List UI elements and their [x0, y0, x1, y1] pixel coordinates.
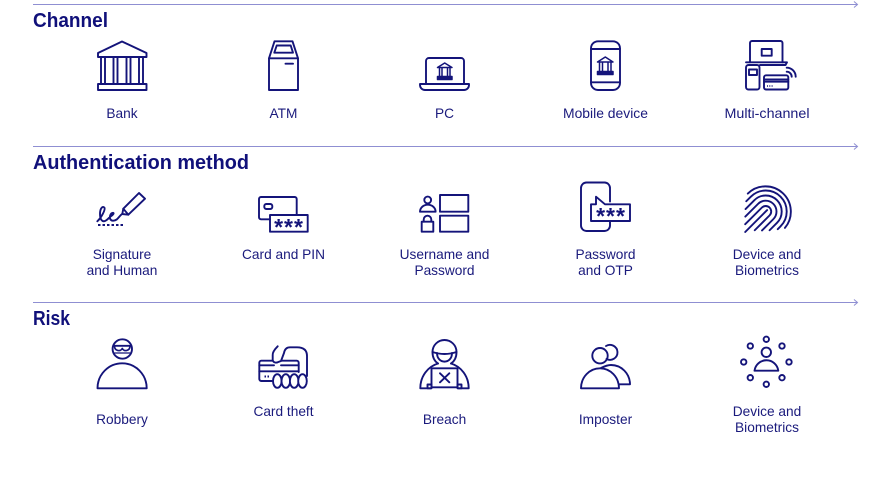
label: imposter: Imposter: [579, 412, 633, 427]
item: mobile device: [563, 41, 648, 121]
item: PC: [420, 58, 469, 121]
arrow: authentication method: [33, 144, 858, 150]
label: mobile device: Mobile device: [563, 106, 648, 121]
arrow: risk: [33, 300, 858, 306]
label: device and biometrics risk: Device and: [733, 404, 801, 419]
icon: PC laptop with bank: [420, 58, 469, 90]
icon: hacker with laptop: [420, 340, 469, 388]
item: device and biometrics risk: [733, 337, 801, 435]
panel: risk: [33, 300, 858, 435]
label: multi-channel: Multi-channel: [724, 106, 810, 121]
icon: mobile with bank: [591, 41, 620, 90]
label: device and biometrics: Device and: [733, 247, 801, 262]
icon: username and password: [420, 195, 468, 232]
label: PC: PC: [435, 106, 454, 121]
icon: card and PIN: [259, 197, 308, 232]
label: signature and human: and Human: [87, 263, 157, 278]
heading: channel: Channel: [33, 10, 108, 32]
icon: bank: [98, 42, 146, 90]
icon: phone and OTP bubble: [581, 182, 630, 231]
OTP asterisks: ***: [596, 203, 626, 229]
item: signature and human: [87, 193, 157, 278]
icon: hand taking card: [259, 346, 307, 388]
label: bank: Bank: [106, 106, 138, 121]
item: ATM: [269, 41, 298, 121]
panel: channel: [33, 2, 858, 121]
icon: signature and pen: [97, 193, 145, 225]
icon: two overlapping people: [581, 345, 630, 388]
item: bank: [98, 42, 146, 121]
label: robbery: Robbery: [96, 412, 148, 427]
item: multi-channel: [724, 41, 810, 121]
item: device and biometrics: [727, 176, 801, 278]
label: username and password: Password: [414, 263, 475, 278]
label: username and password: Username and: [400, 247, 489, 262]
label: card and PIN: Card and PIN: [242, 247, 325, 262]
label: breach: Breach: [423, 412, 466, 427]
item: card and PIN: [242, 197, 325, 262]
arrow: channel: [33, 2, 858, 8]
icon: multi-channel devices: [746, 41, 796, 90]
item: imposter: [579, 345, 633, 427]
label: signature and human: Signature: [93, 247, 151, 262]
heading: risk: Risk: [33, 308, 71, 330]
label: device and biometrics risk: Biometrics: [735, 420, 799, 435]
icon: ATM: [269, 41, 298, 90]
item: breach: [420, 340, 469, 427]
label: password and OTP: and OTP: [578, 263, 633, 278]
icon: robber: [98, 339, 147, 388]
PIN asterisks: ***: [274, 214, 304, 240]
item: username and password: [400, 195, 489, 278]
label: password and OTP: Password: [575, 247, 636, 262]
panel: authentication method: [33, 144, 858, 278]
label: device and biometrics: Biometrics: [735, 263, 799, 278]
icon: fingerprint: [727, 176, 801, 250]
icon: person surrounded by dots: [741, 337, 792, 387]
label: card theft: Card theft: [253, 404, 314, 419]
label: ATM: ATM: [270, 106, 297, 121]
item: robbery: [96, 339, 148, 427]
item: password and OTP: [575, 182, 636, 278]
heading: authentication method: Authentication method: [33, 152, 249, 174]
item: card theft: [253, 346, 314, 419]
